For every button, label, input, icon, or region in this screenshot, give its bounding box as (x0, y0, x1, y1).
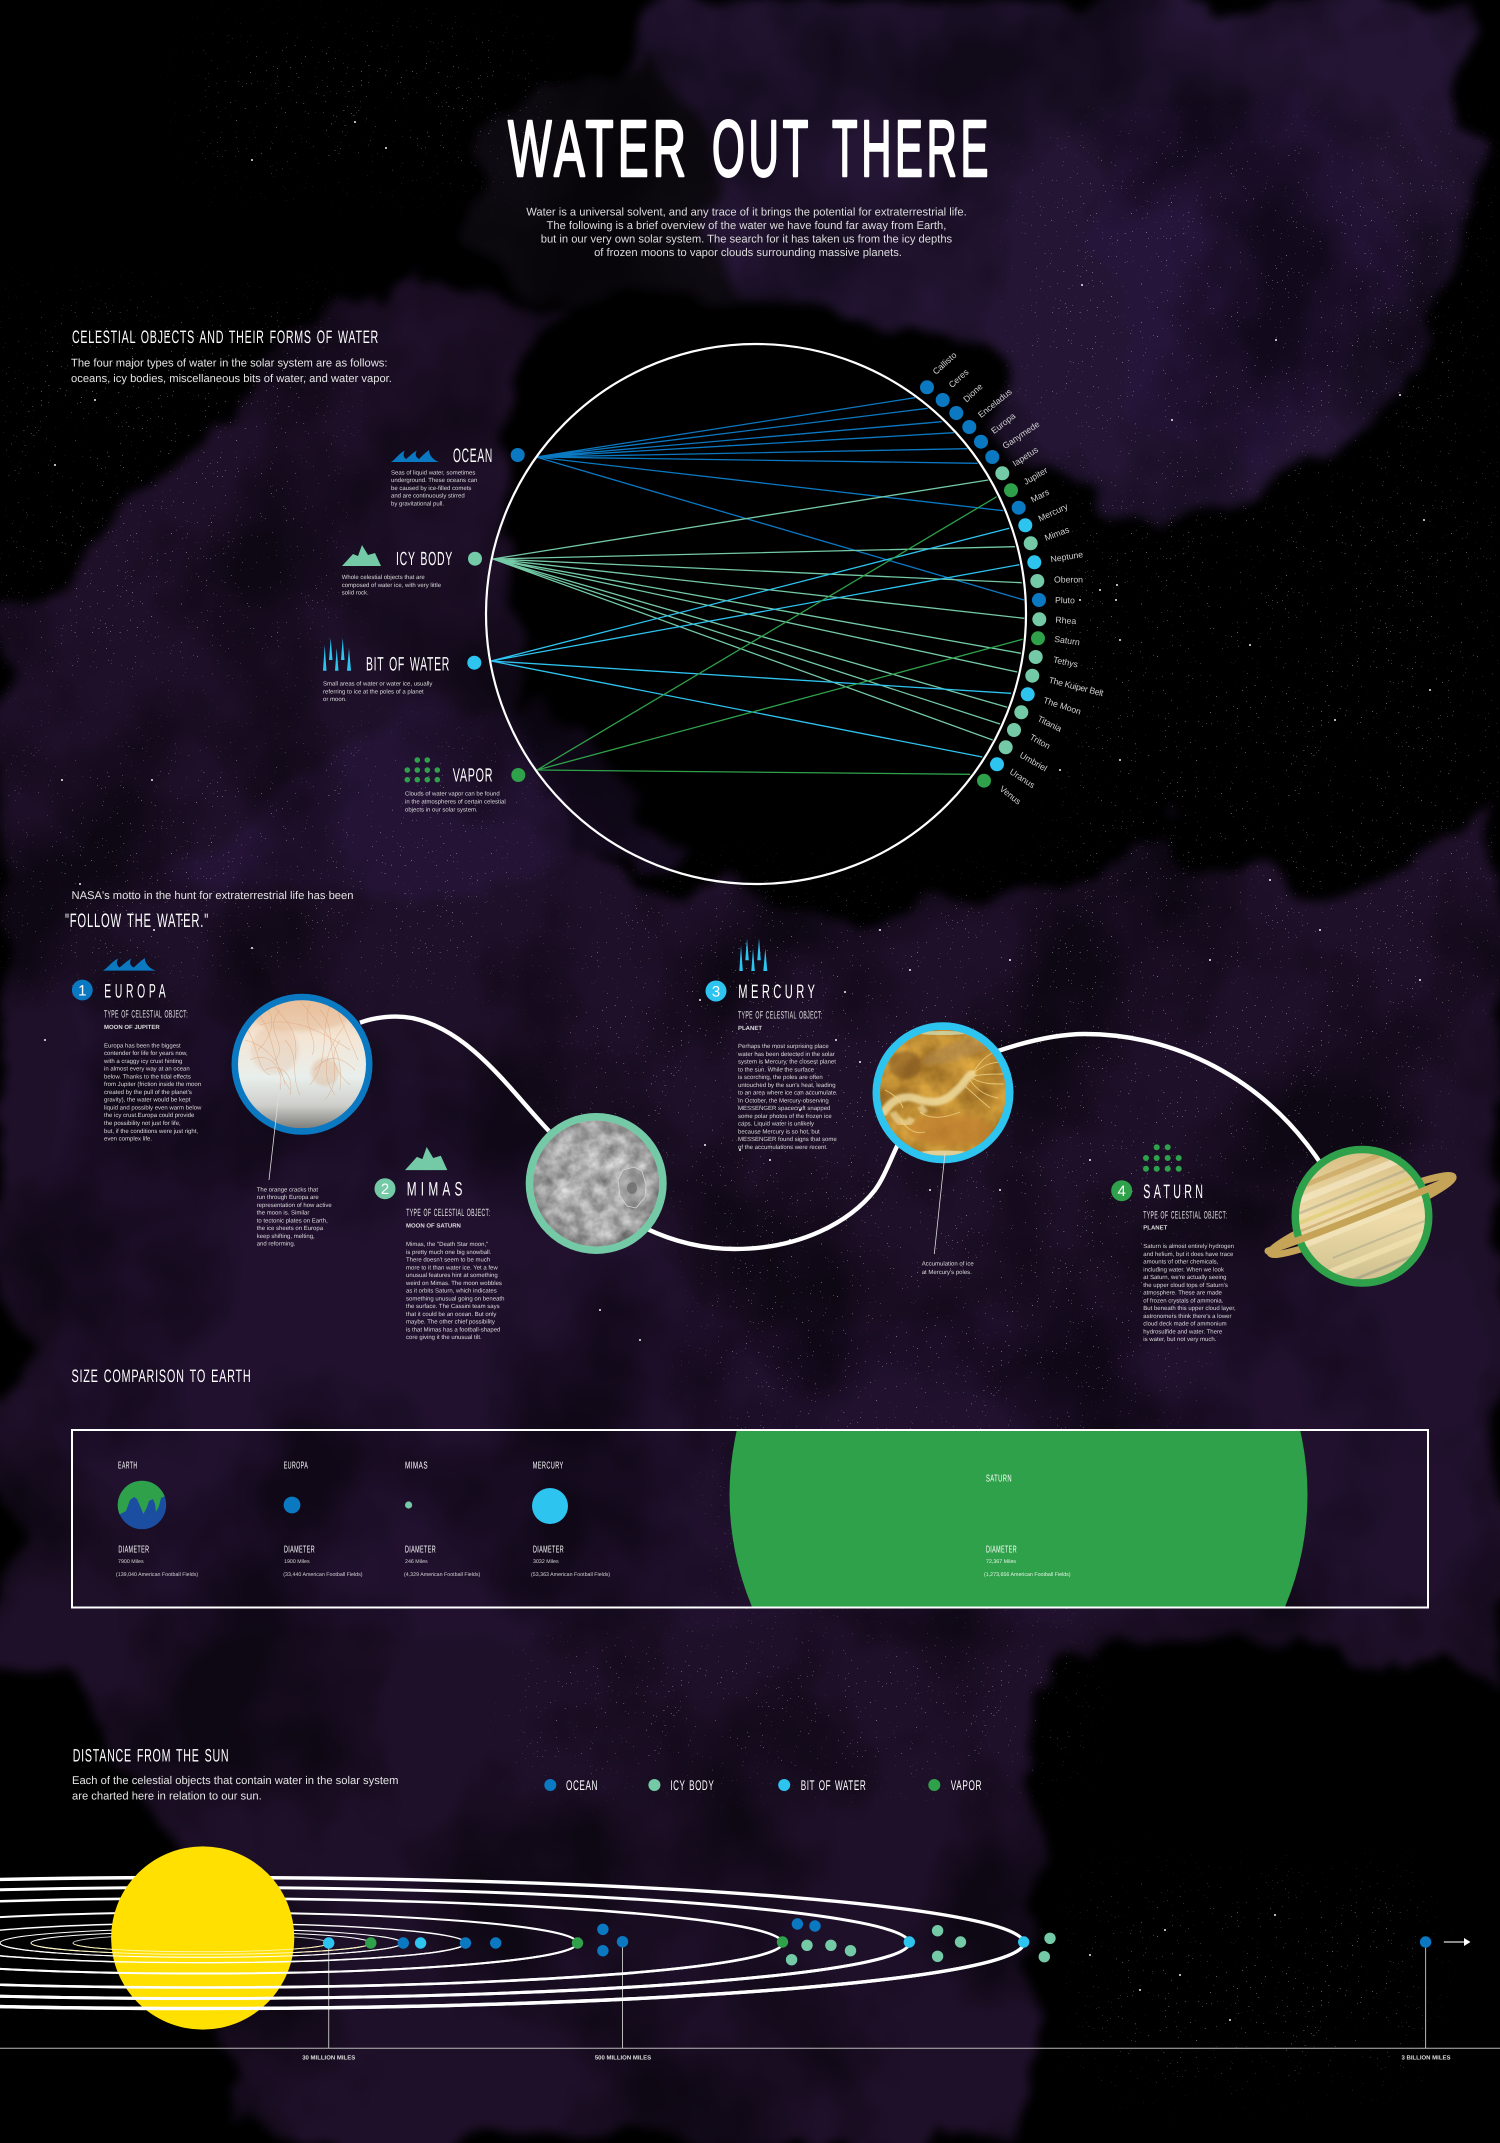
legend: vapor: VAPOR (453, 766, 493, 787)
saturn size disc (730, 1431, 1308, 1606)
panel: Mimas: TYPE OF CELESTIAL OBJECT: (406, 1207, 490, 1219)
panel: size comparison box (71, 1429, 1429, 1608)
object names: Oberon (1054, 574, 1083, 584)
number badge (374, 1178, 396, 1199)
panel: Mercury (706, 938, 1010, 1276)
legend: ocean: by gravitational pull. (391, 500, 444, 507)
panel: Mimas: the surface. The Cassini team says (406, 1303, 500, 1310)
object names: Venus (998, 784, 1023, 807)
object names: Callisto (931, 350, 959, 376)
panel: Mimas: is pretty much one big snowball. (406, 1249, 492, 1256)
icon: mountain (342, 545, 381, 566)
number badge: 2 (381, 1181, 389, 1198)
column: Earth (115, 1460, 198, 1578)
number badge (72, 980, 93, 1000)
panel: Mimas: is that Mimas has a football-shaped (406, 1326, 500, 1333)
callout text: at Mercury's poles. (922, 1269, 972, 1276)
panel: Mimas: core giving it the unusual tilt. (406, 1334, 482, 1341)
text: NASA motto intro: NASA's motto in the hunt for extraterrestrial life has been (72, 890, 353, 902)
column: Saturn: (1,273,656 American Football Fields) (984, 1572, 1071, 1578)
panel: Europa: below. Thanks to the tidal effects (104, 1073, 191, 1080)
panel: Mercury: PLANET (738, 1025, 762, 1032)
orbits in front of the sun (0, 1943, 1024, 2010)
path connecting the planets (360, 1017, 1325, 1249)
panel: Europa: created by the pull of the planet's (104, 1089, 192, 1096)
distance labels: 30 MILLION MILES (302, 2054, 355, 2061)
icon: ice spikes (323, 638, 351, 671)
icon: vapor dots (404, 757, 440, 782)
panel: Mimas: maybe. The other chief possibility (406, 1319, 495, 1326)
panel: Saturn: Saturn is almost entirely hydrogen (1143, 1243, 1234, 1250)
callout line (934, 1153, 945, 1254)
planet: Saturn (1266, 1140, 1457, 1295)
object names: Titania (1036, 714, 1064, 734)
intro paragraph: but in our very own solar system. The search for it has taken us from the icy depths (541, 234, 953, 246)
column: Saturn: SATURN (986, 1474, 1012, 1484)
icon: ice spikes (739, 938, 767, 971)
column: Mimas: DIAMETER (405, 1544, 436, 1555)
callout text: the moon is. Similar (257, 1210, 309, 1217)
panel: Saturn: at Saturn, we're actually seeing (1143, 1274, 1227, 1281)
icon: Earth globe (118, 1480, 166, 1530)
legend: water types (544, 1777, 982, 1793)
panel: Mercury: Perhaps the most surprising place (738, 1043, 829, 1050)
panel: Saturn: atmosphere. These are made (1143, 1290, 1223, 1297)
object names: Mercury (1037, 501, 1070, 524)
column: Mercury (531, 1460, 610, 1578)
heading: follow the water: "FOLLOW THE WATER." (65, 910, 209, 932)
panel: Saturn (1111, 1140, 1457, 1343)
title: WATER (508, 104, 690, 193)
object names (931, 350, 1105, 807)
column: Earth: EARTH (118, 1460, 138, 1471)
panel: Europa: Europa has been the biggest (104, 1042, 181, 1049)
column: Saturn: DIAMETER (986, 1544, 1017, 1555)
callout text: to tectonic plates on Earth, (257, 1217, 328, 1224)
callout line (269, 1083, 280, 1180)
chart: solar system distances: 500 MILLION MILES (595, 2054, 651, 2061)
arrow (1444, 1941, 1465, 1943)
panel: Mercury: of the accumulations were recent. (738, 1144, 828, 1151)
panel: Mercury: caps. Liquid water is unlikely (738, 1121, 814, 1128)
panel: Mimas: more to it than water ice. Yet a few (406, 1264, 498, 1271)
legend: icy body: composed of water ice, with very little (342, 582, 442, 589)
legend: ocean: underground. These oceans can (391, 477, 477, 484)
panel: Mimas: There doesn't seem to be much (406, 1257, 490, 1264)
column: Mercury: DIAMETER (533, 1544, 564, 1555)
column: Earth: 7900 Miles (118, 1559, 144, 1565)
intro paragraph: of frozen moons to vapor clouds surrounding massive planets. (594, 247, 902, 259)
panel: Mimas: something unusual going on beneath (406, 1295, 504, 1302)
panel: Saturn: including water. When we look (1143, 1266, 1225, 1273)
panel: Saturn: is water, but not very much. (1143, 1336, 1217, 1343)
object names: Neptune (1050, 549, 1084, 564)
panel: Europa: liquid and possibly even warm below (104, 1104, 202, 1111)
legend: vapor (404, 757, 525, 813)
panel: Saturn: TYPE OF CELESTIAL OBJECT: (1143, 1209, 1227, 1221)
callout text: keep shifting, melting, (257, 1233, 315, 1240)
planet: Mercury (876, 1026, 1010, 1159)
object names: Umbriel (1018, 750, 1049, 773)
legend: icy body (342, 545, 482, 597)
object names: Mimas (1043, 524, 1071, 543)
icon: vapor dots (1143, 1144, 1182, 1172)
legend: water types: BIT OF WATER (801, 1777, 866, 1793)
chart: connections between water types and celestial objects (486, 344, 1105, 884)
panel: Europa: MOON OF JUPITER (104, 1024, 160, 1031)
panel: Mimas: that it could be an ocean. But only (406, 1311, 496, 1318)
column: Europa: 1900 Miles (284, 1559, 310, 1565)
panel: Europa: with a craggy icy crust hinting (103, 1058, 182, 1065)
panel: Mercury: water has been detected in the solar (737, 1051, 835, 1058)
object names: Triton (1028, 732, 1052, 751)
legend: ocean (391, 445, 525, 507)
panel: Saturn: the upper cloud tops of Saturn's (1143, 1282, 1228, 1289)
legend: bit of water: referring to ice at the poles of a planet (323, 688, 424, 695)
intro paragraph: Water is a universal solvent, and any trace of it brings the potential for extraterrestrial life. (526, 206, 967, 218)
object names: Ganymede (1001, 419, 1041, 451)
column: Mercury: 3032 Miles (533, 1559, 559, 1565)
panel: Mercury: system is Mercury, the closest planet (738, 1059, 836, 1066)
panel: Europa: EUROPA (104, 980, 169, 1002)
panel: Mercury: MESSENGER found signs that some (738, 1136, 837, 1143)
legend: icy body: solid rock. (342, 590, 369, 597)
sun (111, 1846, 294, 2030)
panel: Saturn: cloud deck made of ammonium (1143, 1321, 1227, 1328)
legend: bit of water (323, 638, 481, 703)
object names: Tethys (1052, 654, 1080, 670)
text: four major types: oceans, icy bodies, miscellaneous bits of water, and water vapor. (71, 373, 392, 385)
connecting lines (491, 398, 1024, 774)
panel: Saturn: hydrosulfide and water. There (1143, 1328, 1223, 1335)
column: Mimas: 246 Miles (405, 1559, 428, 1565)
callout text: the ice sheets on Europa (257, 1225, 324, 1232)
object dots (920, 380, 1046, 607)
panel: Europa: in almost every way at an ocean (104, 1066, 190, 1073)
ring front (1268, 1178, 1453, 1251)
panel: Europa: but, if the conditions were just right, (104, 1128, 198, 1135)
callout text: representation of how active (257, 1202, 332, 1209)
number badge (1111, 1180, 1132, 1201)
object names: Mars (1029, 487, 1051, 504)
heading: size comparison: SIZE COMPARISON TO EARTH (72, 1366, 252, 1386)
panel: Europa: the icy crust.Europa could provide (104, 1112, 195, 1119)
legend: water types: ICY BODY (670, 1777, 714, 1793)
legend: water types: OCEAN (566, 1777, 598, 1793)
column: Europa: DIAMETER (284, 1544, 315, 1555)
panel: Mercury: some polar photos of the frozen ice (738, 1113, 832, 1120)
object names: The Kuiper Belt (1048, 675, 1105, 698)
chart: solar system distances: 3 BILLION MILES (1401, 2054, 1451, 2061)
object names: Rhea (1055, 615, 1077, 626)
title: THERE (832, 104, 992, 193)
panel: Saturn: PLANET (1143, 1225, 1168, 1232)
bit of water objects (323, 1936, 1029, 1949)
column: Earth: DIAMETER (118, 1544, 149, 1555)
title (508, 104, 992, 193)
legend: vapor: in the atmospheres of certain celestial (405, 798, 506, 805)
number badge: 4 (1118, 1183, 1126, 1200)
panel: Mimas: Mimas, the "Death Star moon," (406, 1241, 488, 1248)
panel: Europa: gravity), the water would be kept (104, 1097, 191, 1104)
legend: vapor: objects in our solar system. (405, 806, 478, 813)
panel: Mimas: MOON OF SATURN (406, 1223, 461, 1230)
panel: Saturn: But beneath this upper cloud layer, (1143, 1305, 1236, 1312)
object names: Dione (961, 381, 985, 404)
planet: Europa (235, 997, 369, 1131)
planet: Mimas (530, 1117, 663, 1250)
big circle (486, 344, 1026, 884)
panel: Mercury: untouched by the sun's heat, leading (738, 1082, 836, 1089)
object names: Pluto (1055, 595, 1075, 605)
object names: Saturn (1054, 634, 1081, 647)
heading: distance from the sun: DISTANCE FROM THE SUN (73, 1746, 229, 1766)
panel: Mercury: is scorching, the poles are often (738, 1074, 823, 1081)
column: Europa: EUROPA (284, 1460, 308, 1471)
panel: Mercury: MESSENGER spacecraft snapped (738, 1105, 830, 1112)
legend: water types: VAPOR (951, 1777, 982, 1793)
column: Saturn (984, 1474, 1071, 1578)
object names: Jupiter (1022, 465, 1049, 487)
column: Mercury: (53,363 American Football Fields) (531, 1572, 610, 1578)
object names: The Moon (1042, 695, 1083, 717)
panel: Mercury: to an area where ice can accumulate. (738, 1090, 838, 1097)
object names: Enceladus (976, 386, 1014, 420)
panel: Mercury: to the sun. While the surface (738, 1066, 815, 1073)
panel: Mimas: MIMAS (407, 1179, 467, 1201)
intro paragraph: The following is a brief overview of the water we have found far away from Earth, (547, 220, 946, 232)
object names: Uranus (1008, 767, 1037, 791)
legend: icy body: ICY BODY (396, 549, 453, 570)
text: distance intro: Each of the celestial objects that contain water in the solar system (72, 1775, 398, 1787)
text: four major types: The four major types of water in the solar system are as follows: (71, 358, 387, 370)
panel: Saturn: astronomers think there's a lower (1143, 1313, 1231, 1320)
column: Mimas (404, 1460, 480, 1578)
ocean objects (398, 1918, 1431, 1956)
number badge: 3 (712, 984, 720, 1000)
legend: bit of water: BIT OF WATER (366, 654, 450, 676)
column: Mimas: MIMAS (405, 1460, 428, 1471)
panel: Saturn: SATURN (1143, 1181, 1206, 1203)
heading: celestial objects: CELESTIAL OBJECTS AND THEIR FORMS OF WATER (72, 327, 379, 347)
panel: Mercury: In October, the Mercury-observing (738, 1097, 829, 1104)
panel: Mimas (374, 1117, 663, 1341)
panel: Europa: the possibility not just for life, (104, 1120, 181, 1127)
panel: Mercury: because Mercury is so hot, but (738, 1128, 820, 1135)
legend: vapor: Clouds of water vapor can be found (405, 790, 500, 797)
column: Earth: (139,040 American Football Fields) (116, 1572, 198, 1578)
panel: Europa: TYPE OF CELESTIAL OBJECT: (104, 1008, 188, 1020)
legend: ocean: and are continuously stirred (391, 493, 465, 500)
panel: Mimas: weird on Mimas. The moon wobbles (405, 1280, 502, 1287)
column: Saturn: 72,367 Miles (986, 1559, 1016, 1565)
vapor objects (365, 1936, 788, 1949)
panel: Europa: from Jupiter (friction inside the moon (104, 1081, 201, 1088)
icy objects (786, 1925, 1056, 1965)
object names: Iapetus (1011, 444, 1041, 468)
title: OUT (712, 104, 812, 193)
icon: waves (391, 450, 439, 462)
object names: Europa (989, 411, 1017, 436)
panel: Mimas: as it orbits Saturn, which indicates (406, 1288, 497, 1295)
number badge: 1 (78, 982, 86, 1000)
legend: icy body: Whole celestial objects that are (342, 574, 425, 581)
panel: Saturn: of frozen crystals of ammonia. (1143, 1297, 1224, 1304)
text: distance intro: are charted here in relation to our sun. (72, 1791, 262, 1803)
callout text: Accumulation of ice (922, 1261, 974, 1268)
panel: Europa (72, 958, 369, 1248)
column: Mimas: (4,329 American Football Fields) (404, 1572, 480, 1578)
legend: ocean: be caused by ice-filled comets (391, 485, 471, 492)
panel: Saturn: amounts of other chemicals, (1143, 1259, 1219, 1266)
legend: bit of water: or moon. (323, 697, 347, 703)
object names: Ceres (947, 366, 971, 390)
panel: Mimas: unusual features hint at something (406, 1272, 498, 1279)
chart: solar system distances (0, 1846, 1500, 2061)
legend: ocean: OCEAN (453, 445, 493, 467)
panel: Europa: contender for life for years now, (104, 1050, 188, 1057)
icon: mountain (405, 1147, 447, 1170)
legend: bit of water: Small areas of water or water ice, usually (323, 681, 432, 688)
column: Europa: (33,440 American Football Fields) (283, 1572, 363, 1578)
panel: Europa: even complex life. (104, 1136, 152, 1143)
panel: Mercury: MERCURY (738, 981, 818, 1003)
number badge (706, 980, 726, 1002)
column: Mercury: MERCURY (533, 1460, 564, 1471)
orbits behind the sun (0, 1878, 1024, 2008)
callout text: The orange cracks that (257, 1186, 318, 1193)
column: Europa (283, 1460, 363, 1578)
callout text: and reforming. (257, 1241, 296, 1248)
legend: ocean: Seas of liquid water, sometimes (391, 469, 475, 476)
callout text: run through Europa are (257, 1194, 319, 1201)
axis and leader lines (0, 1942, 1500, 2048)
icon: waves (103, 958, 156, 971)
panel: Saturn: and helium, but it does have trace (1143, 1251, 1234, 1258)
panel: Mercury: TYPE OF CELESTIAL OBJECT: (738, 1009, 823, 1021)
